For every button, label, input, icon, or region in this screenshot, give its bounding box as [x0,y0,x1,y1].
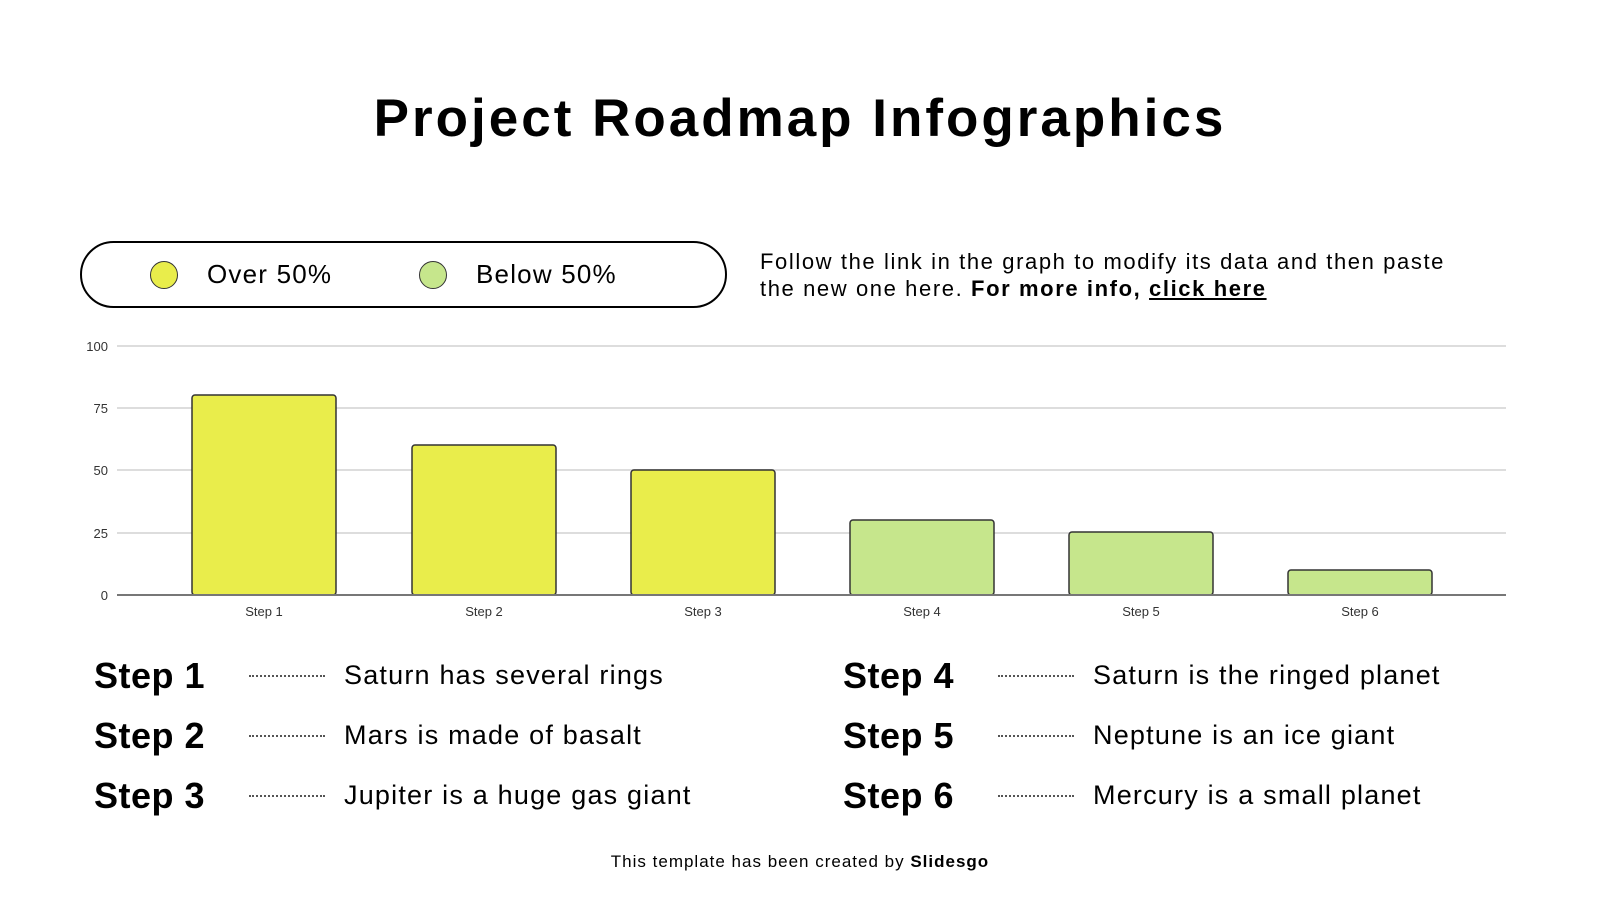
title: Project Roadmap Infographics [374,89,1226,148]
step 4: Step 4 [843,655,954,696]
bar chart [86,339,1506,619]
step 5: Step 5 [843,715,954,756]
step 5 [843,715,1395,756]
bar chart: Step 6 [1341,604,1379,619]
step 1: Saturn has several rings [344,660,664,690]
bar chart: 25 [94,526,108,541]
step list left [94,655,692,816]
step 6 [843,775,1422,816]
step 6: Step 6 [843,775,954,816]
step 5: Neptune is an ice giant [1093,720,1395,750]
footer credit: This template has been created by Slidesgo [611,852,989,871]
step list right [843,655,1441,816]
bar chart: 0 [101,588,108,603]
bar chart: Step 3 [684,604,722,619]
step 1 [94,655,664,696]
step 2 [94,715,642,756]
info text: the new one here. For more info, click here [760,276,1267,301]
bar chart: Step 1 [245,604,283,619]
legend: over 50%: Over 50% [207,259,332,289]
step 1: Step 1 [94,655,205,696]
bar chart: Step 4 [903,604,941,619]
info text [760,249,1445,301]
step 4: Saturn is the ringed planet [1093,660,1441,690]
step 2: Step 2 [94,715,205,756]
step 4 [843,655,1441,696]
step 3 [94,775,692,816]
bar chart: 50 [94,463,108,478]
legend: below 50%: Below 50% [476,259,617,289]
bar chart: 75 [94,401,108,416]
legend pill [80,241,727,308]
bar chart: 100 [86,339,108,354]
bar chart: Step 5 [1122,604,1160,619]
step 3: Jupiter is a huge gas giant [344,780,692,810]
bar chart: Step 2 [465,604,503,619]
step 2: Mars is made of basalt [344,720,642,750]
legend: over 50% [150,259,332,289]
step 3: Step 3 [94,775,205,816]
step 6: Mercury is a small planet [1093,780,1422,810]
info text: Follow the link in the graph to modify its data and then paste [760,249,1445,274]
